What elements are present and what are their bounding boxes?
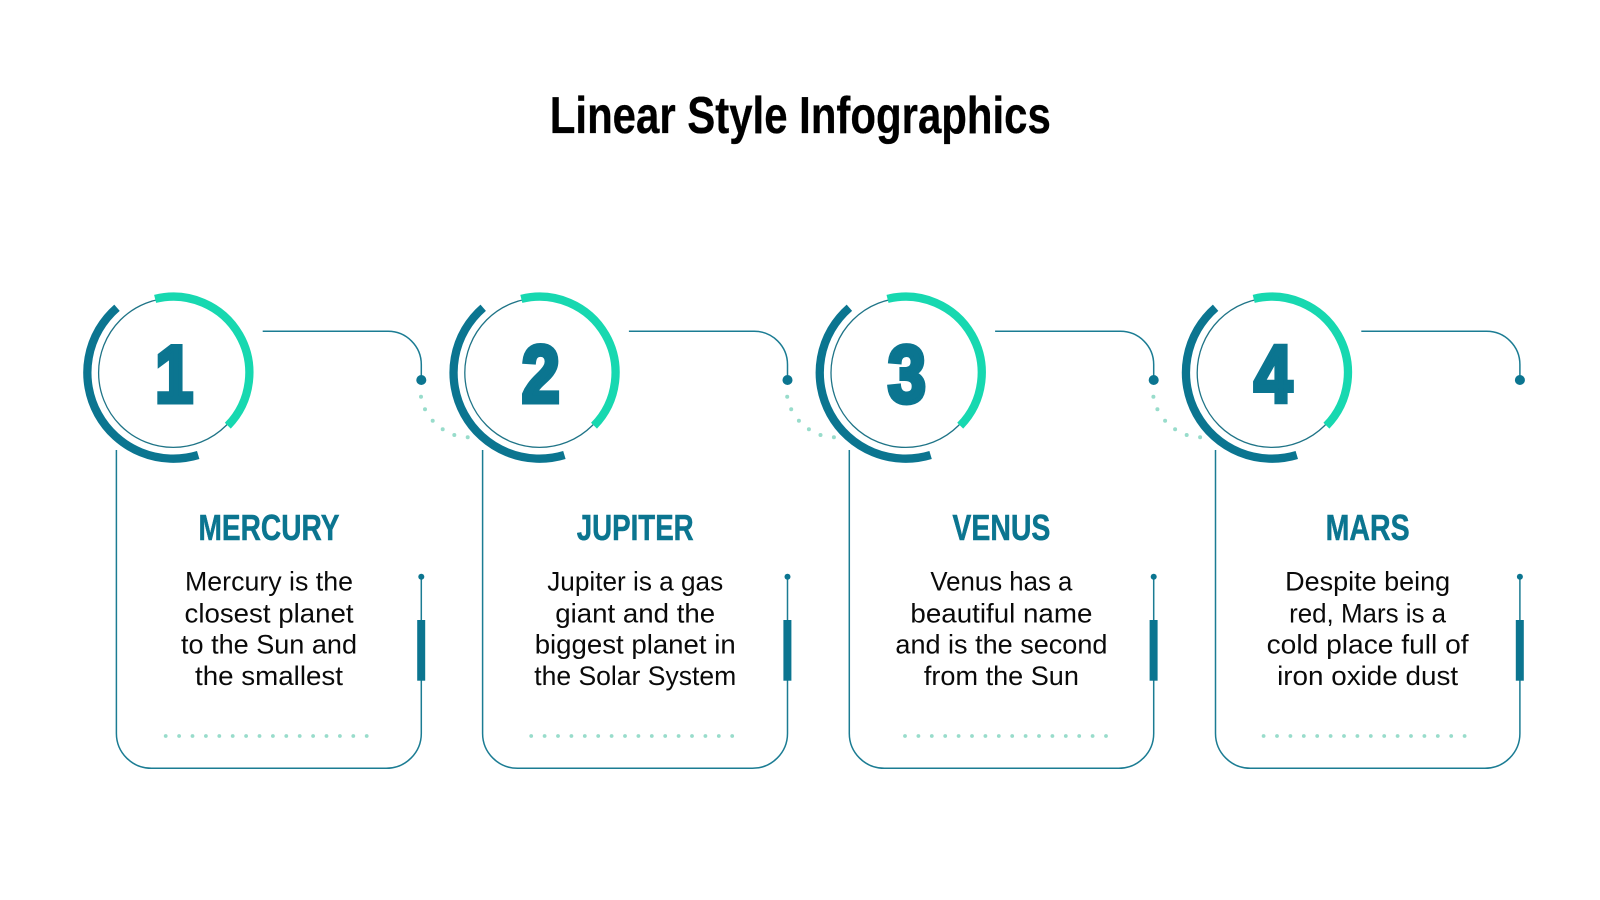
description 2	[534, 567, 736, 691]
description 1: to the Sun and	[181, 630, 357, 660]
description 4: red, Mars is a	[1289, 598, 1446, 628]
step 3: Venus	[820, 297, 1202, 768]
card outline 4	[1215, 450, 1520, 768]
heading 1: MERCURY	[198, 507, 340, 548]
side marker 2	[783, 574, 791, 681]
description 1	[181, 567, 357, 691]
side marker 4	[1516, 574, 1524, 681]
description 2: the Solar System	[534, 661, 736, 691]
dotted rule 2	[529, 734, 734, 738]
connector line with dot 2	[629, 331, 792, 385]
description 3: Venus has a	[930, 567, 1073, 597]
connector line with dot 3	[995, 331, 1159, 385]
dotted rule 4	[1262, 734, 1466, 738]
description 1: the smallest	[195, 661, 344, 691]
step 4: Mars	[1186, 297, 1525, 768]
number ring 3: 3	[888, 330, 926, 420]
description 2: Jupiter is a gas	[547, 567, 723, 597]
dotted connector 1 to 2	[419, 395, 470, 439]
dotted connector 2 to 3	[785, 395, 836, 439]
description 4: Despite being	[1285, 567, 1450, 597]
description 3: from the Sun	[924, 661, 1079, 691]
dotted rule 1	[164, 734, 369, 738]
description 3	[895, 567, 1107, 691]
dotted connector 3 to 4	[1151, 395, 1202, 439]
description 1: Mercury is the	[185, 567, 353, 597]
number ring 4: 4	[1254, 330, 1292, 420]
description 4	[1267, 567, 1469, 691]
connector line with dot 1	[263, 331, 426, 385]
step 1: Mercury	[87, 297, 470, 768]
number ring 3	[820, 297, 982, 459]
number ring 1: 1	[155, 330, 193, 420]
card outline 1	[116, 450, 421, 768]
heading 4: MARS	[1326, 507, 1410, 548]
heading 3: VENUS	[952, 507, 1050, 548]
card outline 3	[849, 450, 1154, 768]
description 2: giant and the	[555, 598, 715, 628]
description 3: beautiful name	[910, 598, 1092, 628]
dotted rule 3	[903, 734, 1108, 738]
connector line with dot 4	[1361, 331, 1525, 385]
number ring 2	[454, 297, 616, 459]
number ring 2: 2	[522, 330, 560, 420]
description 3: and is the second	[895, 630, 1107, 660]
side marker 1	[417, 574, 425, 681]
description 1: closest planet	[184, 598, 354, 628]
card outline 2	[483, 450, 788, 768]
description 4: iron oxide dust	[1277, 661, 1459, 691]
number ring 1	[87, 297, 249, 459]
description 2: biggest planet in	[535, 630, 736, 660]
heading 2: JUPITER	[577, 507, 694, 548]
step 2: Jupiter	[454, 297, 836, 768]
description 4: cold place full of	[1267, 630, 1469, 660]
side marker 3	[1150, 574, 1158, 681]
title: Linear Style Infographics	[550, 87, 1051, 145]
number ring 4	[1186, 297, 1348, 459]
